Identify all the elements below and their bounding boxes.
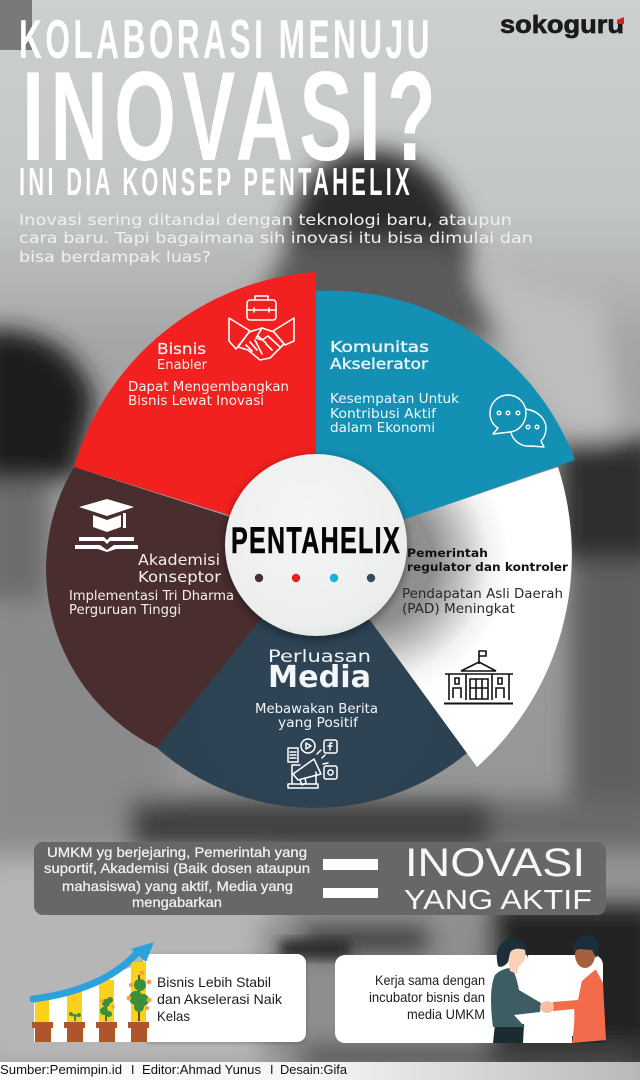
icon: government building [444, 651, 513, 704]
akademisi text: Akademisi [138, 551, 220, 569]
footer credits: I [270, 1063, 273, 1077]
pemerintah text: (PAD) Meningkat [402, 601, 515, 617]
corner block [0, 0, 32, 50]
center label: PENTAHELIX [231, 520, 401, 561]
card text: Bisnis Lebih Stabil [157, 974, 271, 990]
equals sign [323, 859, 378, 898]
plants [69, 971, 151, 1021]
footer credits: I [131, 1063, 134, 1077]
footer credits [0, 1062, 640, 1080]
bisnis text [128, 340, 289, 409]
man right [540, 935, 606, 1043]
icon: chat bubbles [490, 395, 546, 447]
footer credits: Desain:Gifa [280, 1063, 347, 1077]
card: kerja sama [335, 935, 606, 1043]
card text: dan Akselerasi Naik [157, 991, 283, 1007]
summary bar [34, 841, 606, 915]
komunitas text: Kesempatan Untuk [330, 391, 459, 407]
card text: Kelas [157, 1008, 190, 1024]
title [19, 8, 442, 204]
komunitas text: dalam Ekonomi [330, 420, 435, 436]
bisnis text: Bisnis Lewat Inovasi [128, 393, 264, 409]
media text: Perluasan [268, 647, 371, 666]
pemerintah text: regulator dan kontroler [407, 560, 568, 574]
summary text: mahasiswa) yang aktif, Media yang [62, 878, 293, 894]
footer credits: Sumber:Pemimpin.id [0, 1063, 122, 1077]
card text [369, 972, 485, 1022]
result text: YANG AKTIF [404, 884, 592, 915]
illustration: two men shaking hands [491, 935, 606, 1043]
center circle [225, 454, 407, 636]
pemerintah text [402, 546, 568, 617]
intro paragraph: bisa berdampak luas? [19, 248, 211, 266]
wedge: akademisi [46, 467, 270, 748]
card text: media UMKM [407, 1006, 485, 1022]
komunitas text: Komunitas [330, 338, 429, 356]
komunitas text: Akselerator [330, 355, 429, 373]
wedge: bisnis [74, 272, 316, 520]
card text: incubator bisnis dan [369, 989, 485, 1005]
komunitas text [330, 338, 459, 436]
akademisi text: Perguruan Tinggi [69, 602, 181, 618]
intro paragraph [19, 211, 533, 266]
komunitas text: Kontribusi Aktif [330, 406, 437, 422]
center dots [255, 574, 375, 582]
media text [255, 647, 378, 731]
man left [491, 939, 541, 1043]
wedge: komunitas [316, 291, 575, 521]
akademisi text: Konseptor [138, 568, 222, 586]
akademisi text [69, 551, 234, 618]
pemerintah text: Pemerintah [407, 546, 488, 560]
intro paragraph: Inovasi sering ditandai dengan teknologi baru, ataupun [19, 211, 512, 229]
summary text: mengabarkan [132, 894, 222, 910]
media text: yang Positif [278, 715, 359, 731]
footer credits: Editor:Ahmad Yunus [142, 1063, 261, 1077]
growth arrow [33, 942, 154, 999]
handshake [540, 1001, 554, 1013]
bisnis text: Dapat Mengembangkan [128, 379, 289, 395]
summary text: UMKM yg berjejaring, Pemerintah yang [47, 844, 307, 860]
media text: Media [268, 660, 371, 695]
intro paragraph: cara baru. Tapi bagaimana sih inovasi itu bisa dimulai dan [19, 229, 533, 247]
chart backing [34, 960, 150, 1042]
pemerintah text: Pendapatan Asli Daerah [402, 586, 563, 602]
bisnis text: Enabler [157, 358, 208, 373]
icon: briefcase and handshake [229, 296, 294, 360]
logo: sokoguru: sokoguru [500, 11, 624, 39]
summary text: suportif, Akademisi (Baik dosen ataupun [44, 860, 310, 876]
pie chart: pentahelix [46, 272, 575, 808]
summary text [44, 844, 310, 910]
wedge: pemerintah [370, 467, 572, 767]
bisnis text: Bisnis [157, 340, 206, 358]
akademisi text: Implementasi Tri Dharma [69, 588, 234, 604]
card text: Kerja sama dengan [375, 972, 485, 988]
result text: INOVASI [405, 841, 585, 885]
icon: graduation cap and book [75, 499, 138, 552]
result text [404, 841, 592, 915]
card: bisnis lebih stabil [32, 942, 306, 1042]
wedge: media [157, 620, 467, 808]
growth bars [35, 962, 146, 1024]
card text [157, 974, 283, 1024]
media text: Mebawakan Berita [255, 701, 378, 717]
plant pots [32, 1022, 149, 1042]
icon: megaphone and social media [288, 739, 337, 788]
